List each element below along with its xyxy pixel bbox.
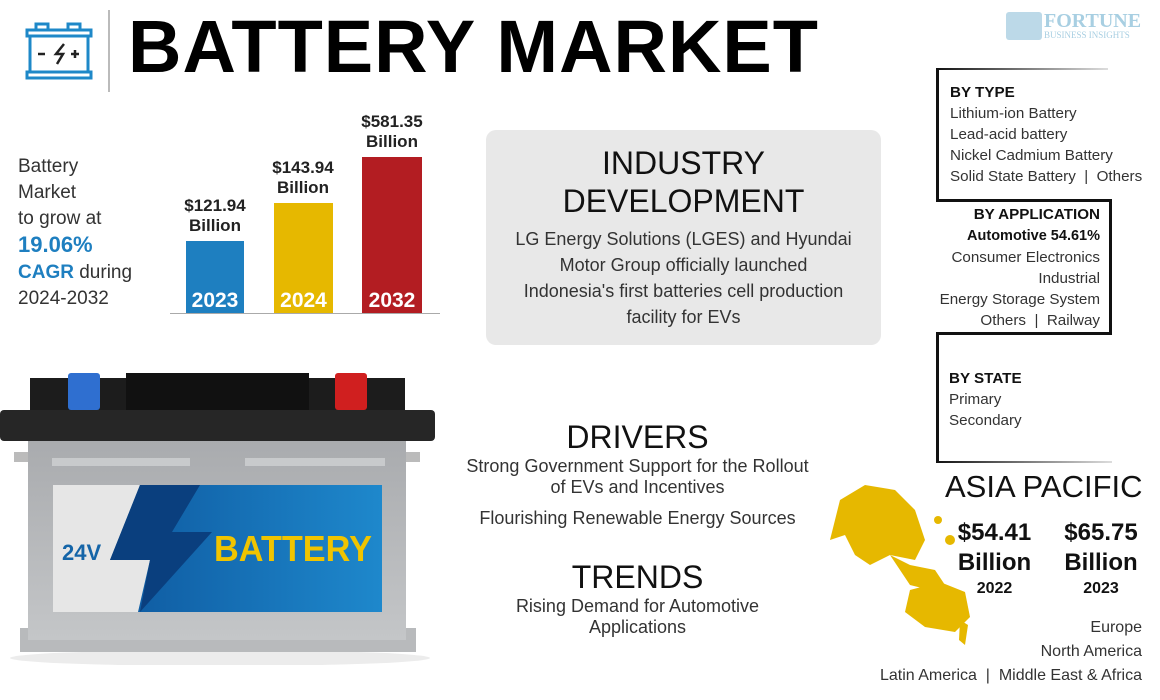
stats: 2022: [977, 580, 1012, 597]
drivers: [466, 419, 809, 528]
bar chart: Billion: [189, 216, 241, 235]
panel: industry development: DEVELOPMENT: [563, 183, 804, 219]
battery image: BATTERY: [214, 528, 372, 569]
panel: industry development: Motor Group officially launched: [560, 255, 807, 275]
region: asia pacific: ASIA PACIFIC: [945, 469, 1143, 504]
bar chart: $581.35: [361, 112, 423, 131]
bar chart: 2032: [369, 289, 415, 312]
title: [108, 10, 110, 92]
stats: [958, 519, 1031, 597]
panel: segments: BY STATE: [949, 370, 1022, 387]
map: [830, 485, 970, 645]
icon: battery: [26, 22, 92, 80]
panel: segments: Industrial: [1038, 270, 1100, 287]
trends: Applications: [589, 617, 686, 637]
text: CAGR: Battery: [18, 156, 78, 177]
drivers: Flourishing Renewable Energy Sources: [479, 508, 796, 528]
trends: TRENDS: [572, 559, 703, 595]
panel: segments: Solid State Battery | Others: [950, 168, 1142, 185]
battery image: [0, 373, 435, 665]
panel: segments: BY APPLICATION: [974, 206, 1100, 223]
text: CAGR: 19.06%: [18, 232, 93, 257]
trends: Rising Demand for Automotive: [516, 596, 759, 616]
other regions: Europe: [1090, 619, 1142, 636]
bar chart: $121.94: [184, 196, 246, 215]
panel: industry development: facility for EVs: [626, 307, 741, 327]
logo: [1006, 10, 1141, 40]
drivers: DRIVERS: [566, 419, 709, 455]
stats: Billion: [958, 549, 1031, 576]
text: BATTERY MARKET: [128, 5, 819, 88]
panel: segments: Energy Storage System: [940, 291, 1100, 308]
drivers: Strong Government Support for the Rollout: [466, 456, 809, 476]
text: CAGR: Market: [18, 182, 76, 203]
bar chart: Billion: [277, 178, 329, 197]
panel: industry development: [486, 130, 881, 345]
bar chart: Billion: [366, 132, 418, 151]
panel: industry development: LG Energy Solutions (LGES) and Hyundai: [515, 229, 852, 249]
panel: industry development: Indonesia's first batteries cell production: [524, 281, 843, 301]
bar chart: 2024: [280, 289, 327, 312]
panel: industry development: INDUSTRY: [602, 145, 765, 181]
other regions: North America: [1041, 643, 1142, 660]
panel: segments: [936, 68, 1142, 463]
panel: segments: Automotive 54.61%: [967, 228, 1100, 244]
drivers: of EVs and Incentives: [550, 477, 725, 497]
stats: $54.41: [958, 519, 1031, 546]
text: Billion: [1064, 549, 1138, 576]
panel: segments: Consumer Electronics: [951, 249, 1100, 266]
panel: segments: Primary: [949, 391, 1001, 408]
bar chart: $143.94: [272, 158, 334, 177]
other regions: [880, 619, 1142, 684]
panel: segments: BY TYPE: [950, 84, 1015, 101]
logo: BUSINESS INSIGHTS: [1044, 30, 1130, 40]
bar chart: [170, 112, 440, 314]
text: 2023: [1083, 580, 1119, 597]
panel: segments: Others | Railway: [980, 312, 1100, 329]
panel: segments: Lead-acid battery: [950, 126, 1067, 143]
panel: segments: Secondary: [949, 412, 1022, 429]
other regions: Latin America | Middle East & Africa: [880, 667, 1142, 684]
logo: FORTUNE: [1044, 10, 1141, 32]
text: CAGR: 2024-2032: [18, 288, 109, 309]
text: $65.75: [1064, 519, 1138, 546]
bar chart: 2023: [192, 289, 238, 312]
trends: [516, 559, 759, 637]
battery image: 24V: [62, 540, 101, 565]
text: CAGR: CAGR during: [18, 262, 132, 283]
panel: segments: Nickel Cadmium Battery: [950, 147, 1113, 164]
panel: segments: Lithium-ion Battery: [950, 105, 1077, 122]
text: CAGR: to grow at: [18, 208, 101, 229]
text: CAGR: [18, 156, 132, 309]
